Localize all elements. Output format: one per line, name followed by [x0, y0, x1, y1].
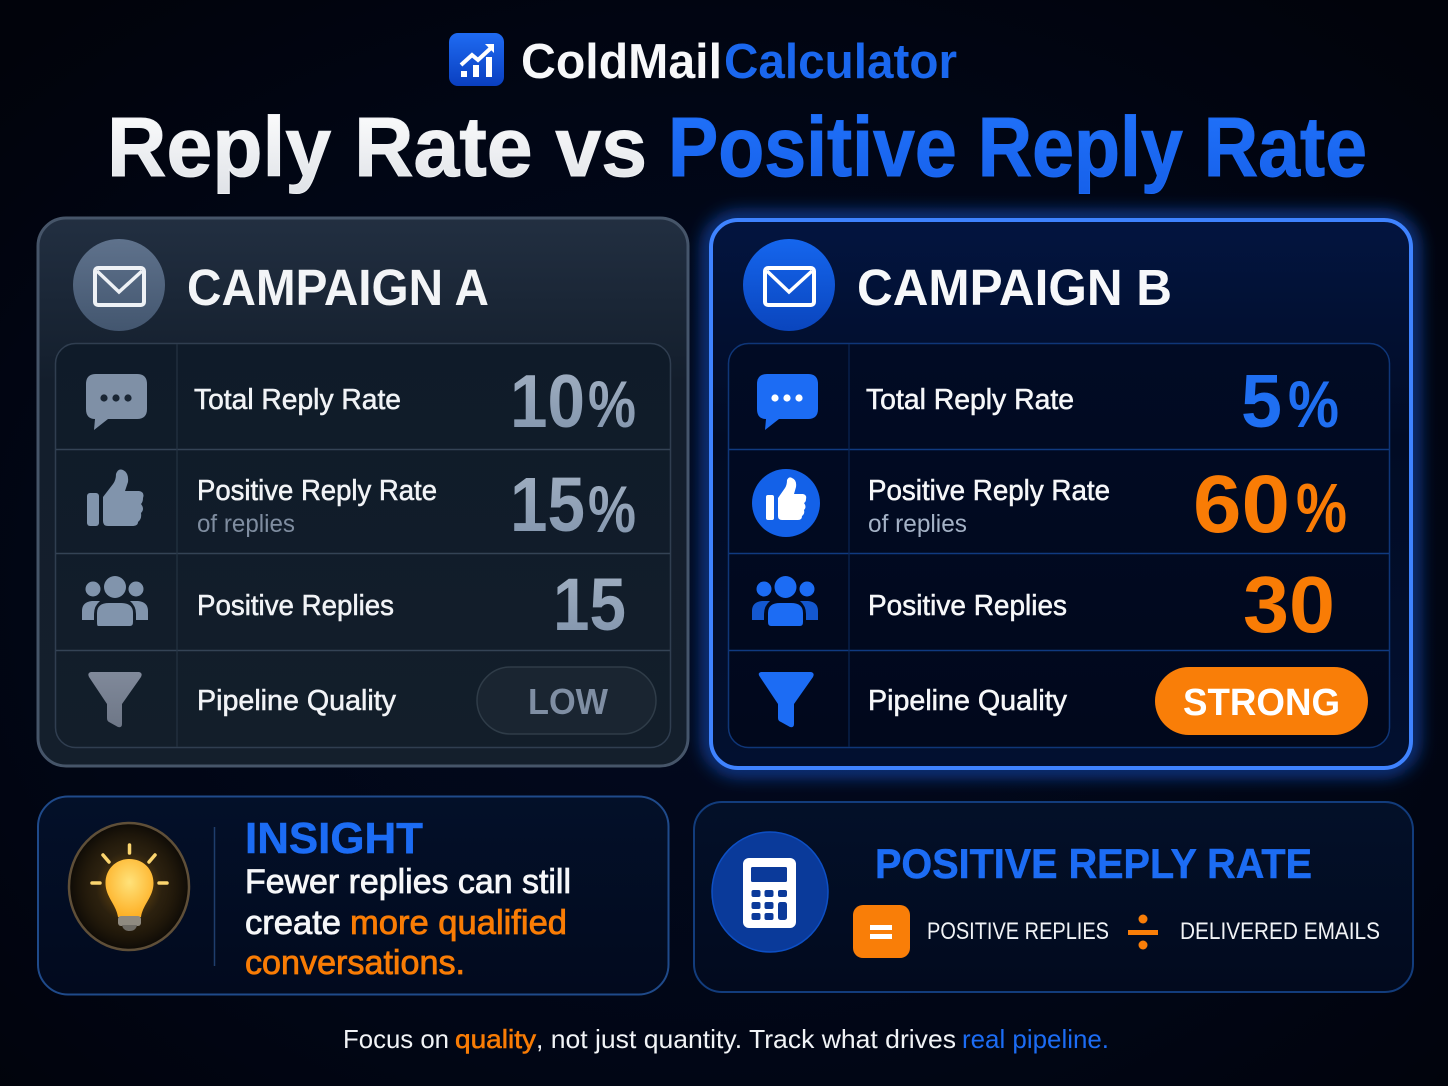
title [107, 100, 1367, 194]
icon: calculator [712, 832, 828, 952]
row: positive reply rate [752, 459, 1347, 550]
icon: funnel [759, 672, 814, 727]
insight heading: INSIGHT [245, 814, 423, 863]
logo wordmark: ColdMail [521, 35, 722, 89]
logo icon [449, 33, 504, 86]
icon: people [82, 576, 148, 626]
formula heading: POSITIVE REPLY RATE [875, 840, 1312, 887]
row: positive replies [752, 560, 1335, 649]
campaign A metrics table [56, 344, 670, 748]
insight text: Fewer replies can still [245, 863, 571, 901]
value: 5 [1241, 359, 1282, 443]
label: Positive Reply Rate [868, 475, 1110, 507]
footer tagline: quality [455, 1024, 536, 1054]
sublabel: of replies [197, 510, 295, 538]
campaign A header icon [73, 239, 165, 331]
title: Reply Rate vs [107, 100, 647, 194]
icon: thumbs up in circle [752, 469, 820, 537]
insight text: more qualified [350, 904, 567, 942]
formula numerator: POSITIVE REPLIES [927, 918, 1109, 945]
value: 30 [1243, 560, 1335, 649]
row: pipeline quality [759, 667, 1368, 735]
strong badge [1155, 667, 1368, 735]
label: Total Reply Rate [194, 384, 401, 416]
panel: insight [38, 796, 668, 994]
insight text: conversations. [245, 944, 465, 982]
value [1241, 359, 1339, 443]
row: total reply rate [757, 359, 1339, 443]
icon: people [752, 576, 818, 626]
footer tagline: real pipeline. [962, 1024, 1109, 1054]
label: Pipeline Quality [197, 685, 396, 717]
strong badge: STRONG [1183, 682, 1340, 724]
value: 60 [1193, 459, 1290, 550]
label: Positive Reply Rate [197, 475, 437, 507]
icon: funnel [88, 672, 142, 727]
label: Positive Replies [197, 590, 394, 622]
sublabel: of replies [868, 510, 967, 538]
value [510, 462, 636, 548]
value: % [588, 367, 636, 441]
value: 15 [553, 563, 626, 646]
label: Pipeline Quality [868, 685, 1067, 717]
logo wordmark: Calculator [724, 35, 957, 89]
campaign A heading: CAMPAIGN A [187, 259, 489, 316]
icon: light bulb [69, 823, 189, 950]
low badge [477, 667, 656, 734]
low badge: LOW [528, 681, 608, 722]
value: % [1296, 469, 1347, 547]
row: total reply rate [86, 359, 636, 443]
panel: campaign A [38, 218, 688, 766]
icon: equals badge [853, 905, 910, 958]
row: positive reply rate [87, 462, 636, 548]
footer tagline: Focus on [343, 1024, 449, 1054]
panel: campaign B [710, 219, 1412, 769]
icon: divide sign [1128, 914, 1158, 950]
logo [449, 33, 957, 89]
campaign B metrics table [728, 344, 1390, 748]
logo wordmark [521, 35, 957, 89]
insight text [245, 863, 571, 982]
value: % [1288, 367, 1339, 441]
value [510, 359, 636, 443]
insight text: create [245, 904, 341, 942]
label: Total Reply Rate [866, 384, 1074, 416]
row: positive replies [82, 563, 626, 646]
title: Positive Reply Rate [668, 100, 1367, 194]
value: % [588, 472, 636, 546]
value: 15 [510, 462, 585, 548]
campaign B header icon [743, 239, 835, 331]
footer tagline: , not just quantity. Track what drives [536, 1024, 956, 1054]
icon: thumbs up [87, 470, 144, 526]
panel: formula [694, 802, 1413, 992]
campaign B heading: CAMPAIGN B [857, 259, 1172, 316]
value: 10 [510, 359, 585, 443]
formula denominator: DELIVERED EMAILS [1180, 918, 1380, 945]
icon: chat bubble [757, 374, 818, 430]
label: Positive Replies [868, 590, 1067, 622]
row: pipeline quality [88, 667, 656, 734]
icon: chat bubble [86, 374, 147, 430]
footer tagline [343, 1024, 1109, 1054]
value [1193, 459, 1347, 550]
